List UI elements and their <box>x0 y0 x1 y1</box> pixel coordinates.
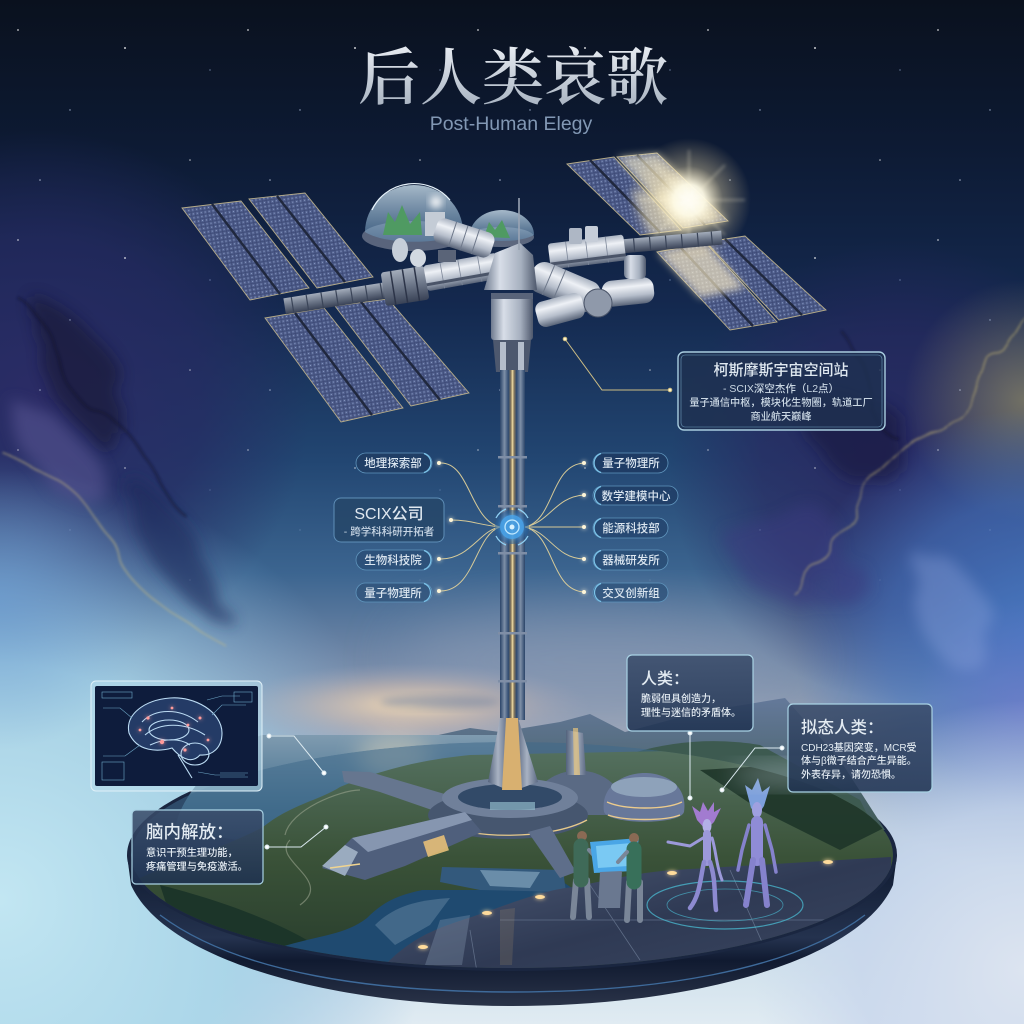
department pills right: 能源科技部 <box>602 521 660 535</box>
base station buildings <box>322 718 684 880</box>
solar arrays right <box>567 153 826 330</box>
brain annotation lines <box>102 692 252 780</box>
callout: intracerebral liberation: 意识干预生理功能， <box>146 846 238 859</box>
brain panel <box>91 681 262 791</box>
department pills right: 交叉创新组 <box>602 586 660 600</box>
domed module <box>604 773 684 822</box>
glass dome small <box>468 210 534 247</box>
station connector <box>563 337 672 392</box>
tower base cones <box>488 718 538 790</box>
callout: Kosmos space station <box>678 352 885 430</box>
title: 后人类哀歌 <box>358 45 668 113</box>
human left <box>573 831 598 917</box>
long wing pod <box>322 812 482 880</box>
console <box>590 838 639 908</box>
mimetic connector <box>720 746 784 792</box>
department pills left: 地理探索部 <box>364 456 422 470</box>
callout: humans: 理性与迷信的矛盾体。 <box>641 706 741 719</box>
callout: humans <box>627 655 753 731</box>
department pills left: 生物科技院 <box>364 553 422 567</box>
callout: intracerebral liberation: 脑内解放： <box>146 822 234 842</box>
human connector <box>688 731 692 800</box>
callout: humans: 人类： <box>641 670 689 688</box>
SCIX company box: SCIX公司 <box>354 506 424 523</box>
central hub and collar <box>484 198 537 372</box>
department pills left: 量子物理所 <box>364 586 422 600</box>
human right <box>618 833 640 920</box>
distant mountains <box>425 698 885 840</box>
subtitle: Post-Human Elegy <box>430 113 593 135</box>
department pills right: 数学建模中心 <box>602 489 671 503</box>
connection dots <box>437 461 586 594</box>
callout: mimetic humans: CDH23基因突变，MCR受 <box>801 741 917 754</box>
callout: mimetic humans <box>788 704 932 792</box>
human figures and console <box>573 831 640 920</box>
floor lights <box>418 860 833 949</box>
sea <box>175 735 520 850</box>
callout: mimetic humans: 拟态人类： <box>801 718 884 737</box>
callout: mimetic humans: 体与β微子结合产生异能。 <box>801 754 917 767</box>
department pills right: 量子物理所 <box>602 456 660 470</box>
walkway <box>528 826 576 878</box>
department pills right <box>593 453 678 602</box>
brain activity points <box>139 707 209 752</box>
department pills left <box>356 453 432 602</box>
station trusses and modules <box>283 216 722 329</box>
brain connectors <box>265 734 328 849</box>
sun glare <box>617 138 751 298</box>
department pills right: 器械研发所 <box>602 553 660 567</box>
SCIX company box <box>334 498 444 542</box>
callout: Kosmos space station: 量子通信中枢，模块化生物圈，轨道工厂 <box>689 396 873 409</box>
space station <box>182 138 826 422</box>
callout: humans: 脆弱但具创造力， <box>641 692 721 705</box>
holographic ring <box>647 881 803 929</box>
sunlight on water <box>357 734 433 782</box>
rotunda <box>428 778 588 839</box>
callout: Kosmos space station: 商业航天巅峰 <box>750 410 812 423</box>
SCIX company box: - 跨学科科研开拓者 <box>344 525 434 538</box>
fog over the right hills <box>730 763 870 787</box>
mimetic human figures <box>668 778 776 910</box>
callout: intracerebral liberation <box>132 810 263 884</box>
callout: mimetic humans: 外表存异，请勿恐惧。 <box>801 768 901 781</box>
icon: translucent brain <box>128 698 222 778</box>
solar arrays left <box>182 193 469 422</box>
callout: Kosmos space station: - SCIX深空杰作（L2点） <box>723 382 839 395</box>
upper wing <box>342 771 465 818</box>
floating disc platform <box>127 739 897 1006</box>
space elevator tower <box>498 370 527 720</box>
alien small <box>668 802 722 910</box>
callout: intracerebral liberation: 疼痛管理与免疫激活。 <box>146 860 248 873</box>
SCIX connection lines <box>441 463 584 592</box>
back building and twin towers <box>536 728 614 815</box>
alien tall <box>738 778 776 905</box>
callout: Kosmos space station: 柯斯摩斯宇宙空间站 <box>713 361 849 379</box>
central node <box>495 509 529 545</box>
glass dome large <box>362 184 464 251</box>
landscape surface <box>131 742 893 968</box>
